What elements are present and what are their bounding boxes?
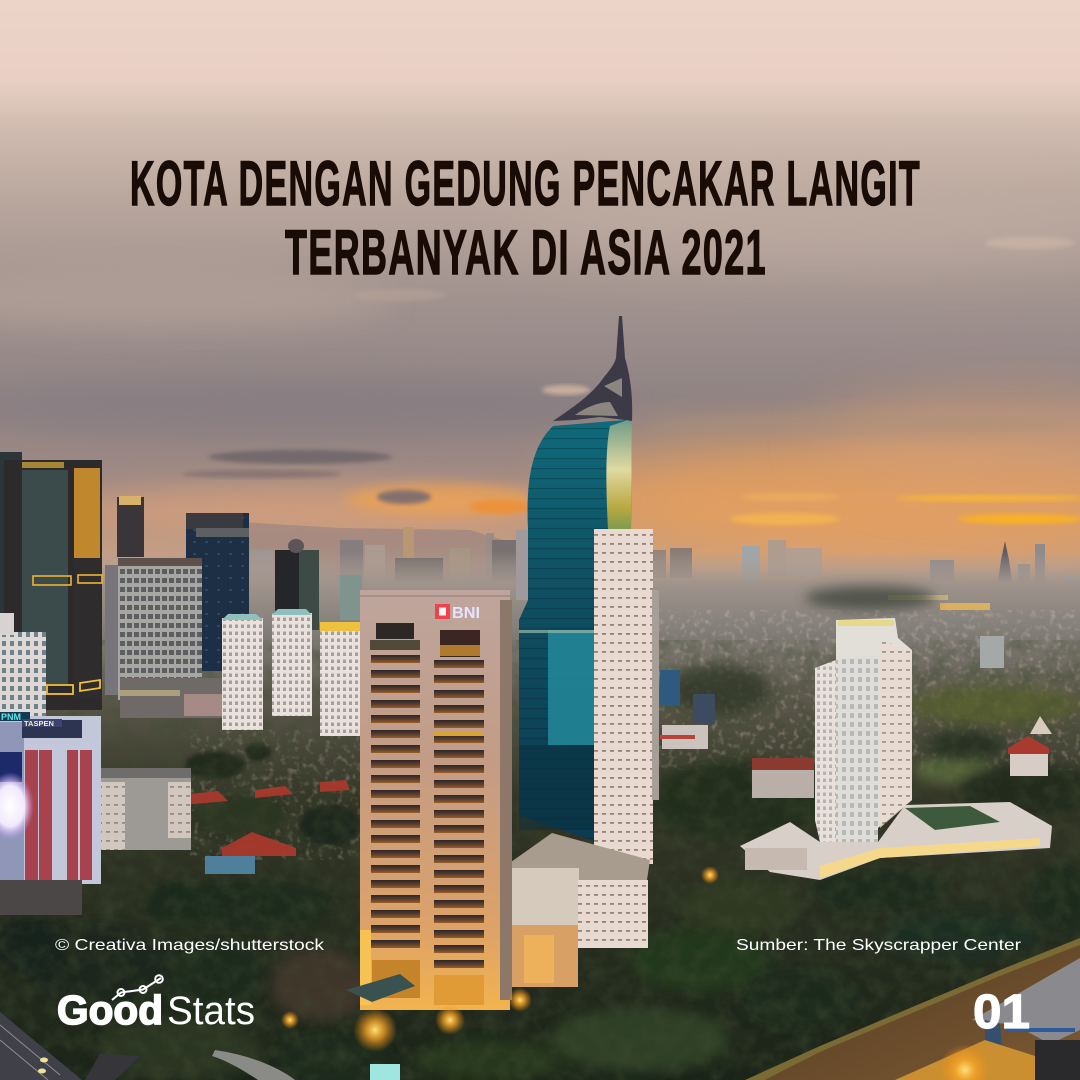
GoodStats logo: Good xyxy=(57,987,163,1033)
building: grey mid-rise xyxy=(101,768,191,850)
low white building beside Wisma 46 xyxy=(511,833,650,987)
BNI logo sign xyxy=(435,604,480,622)
podium with rooftop court xyxy=(740,802,1052,880)
plaza lights xyxy=(895,1040,1035,1080)
ground: dense city and trees xyxy=(0,540,1080,1080)
tall pale building right xyxy=(980,636,1004,668)
building: PNM Taspen tower: TASPEN xyxy=(24,719,54,728)
building: PNM Taspen tower: PNM xyxy=(1,712,21,722)
building: left glass tower xyxy=(0,452,102,710)
distant skyline xyxy=(240,522,1080,625)
plinth under PNM tower xyxy=(0,880,82,915)
building: right white hotel tower xyxy=(815,618,912,842)
building: dark tower behind white towers xyxy=(275,539,319,630)
plaza glow xyxy=(939,1044,991,1080)
building: PNM Taspen tower xyxy=(0,712,101,884)
billboard flare xyxy=(0,772,34,840)
logo chart line icon xyxy=(112,975,163,1000)
building: Wisma 46 white section xyxy=(594,529,659,864)
river xyxy=(765,945,1080,1080)
building: low white block roof xyxy=(0,613,14,635)
low building mid right xyxy=(693,694,715,724)
BNI logo sign: BNI xyxy=(452,605,480,622)
river bank xyxy=(745,938,1080,1080)
title xyxy=(130,149,921,288)
GoodStats logo xyxy=(57,975,255,1033)
blue building right xyxy=(660,670,680,706)
Wisma 46 crown and spire xyxy=(553,316,632,421)
entrance canopy xyxy=(346,974,415,1002)
building: Wisma 46 glass tower xyxy=(516,420,632,842)
building: low white block left xyxy=(0,632,46,716)
background: sunset sky xyxy=(0,0,1080,640)
building: BNI tower xyxy=(360,590,512,1010)
red roofs cluster xyxy=(180,716,1052,874)
photo credit: © Creativa Images/shutterstock xyxy=(55,937,325,954)
page number: 01 xyxy=(973,986,1030,1039)
road bottom left xyxy=(0,1012,400,1080)
source text: Sumber: The Skyscrapper Center xyxy=(736,937,1022,954)
building: grey hotel xyxy=(105,558,222,718)
building: dark blue tower xyxy=(186,513,249,671)
tower crown glow xyxy=(119,496,141,505)
building: white residential towers xyxy=(222,575,362,736)
market roof xyxy=(972,958,1080,1080)
tower behind hotel xyxy=(117,497,144,557)
GoodStats logo: Stats xyxy=(167,989,255,1033)
entrance lights xyxy=(281,866,719,1052)
